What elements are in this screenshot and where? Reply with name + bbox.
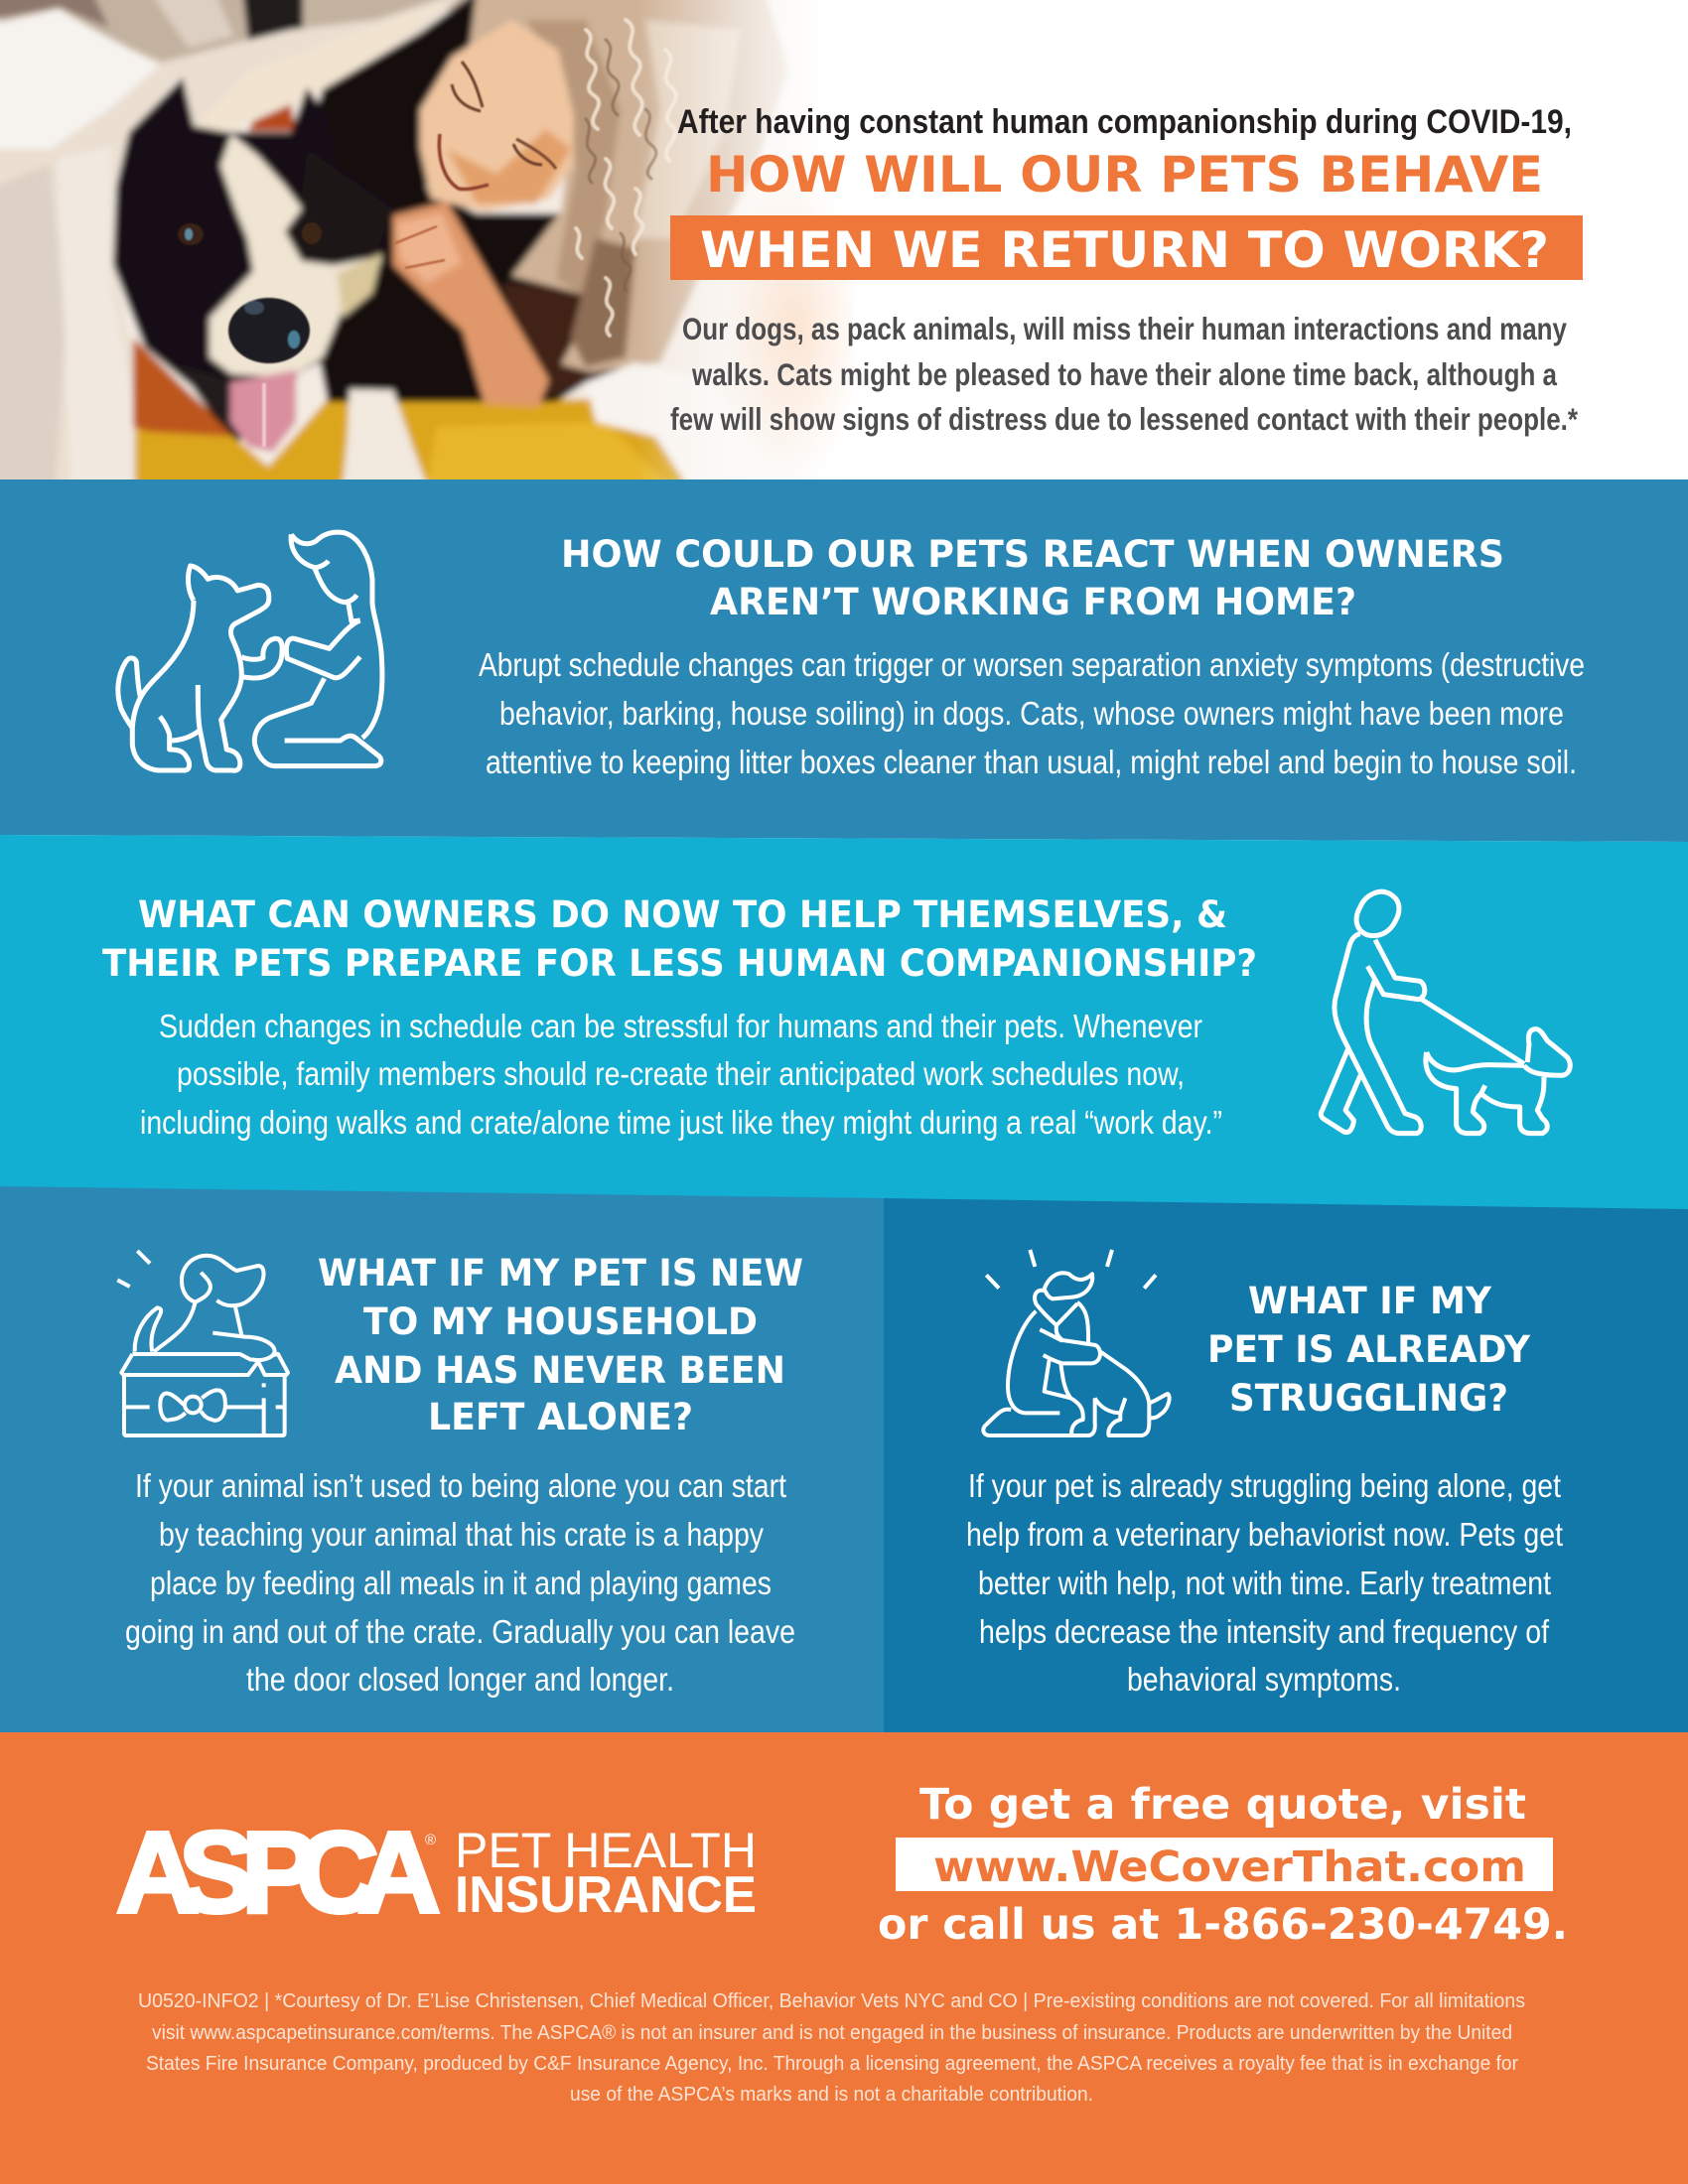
heading: PET IS ALREADY <box>1207 1328 1531 1371</box>
header text block <box>670 103 1583 437</box>
heading: WHAT IF MY <box>1248 1280 1492 1322</box>
body text: including doing walks and crate/alone time just like they might during a real “work day.” <box>140 1105 1222 1142</box>
heading: HOW COULD OUR PETS REACT WHEN OWNERS <box>561 533 1504 576</box>
fine print: use of the ASPCA’s marks and is not a charitable contribution. <box>570 2083 1093 2106</box>
icon: puppy in gift box <box>117 1251 288 1435</box>
body text: If your animal isn’t used to being alone you can start <box>135 1468 787 1505</box>
hand and arm <box>393 202 549 407</box>
footer panel <box>0 1732 1688 2184</box>
logo: ASPCA Pet Health Insurance <box>116 1808 757 1937</box>
heading <box>561 533 1504 623</box>
headline: HOW WILL OUR PETS BEHAVE <box>706 146 1543 204</box>
heading <box>318 1252 803 1438</box>
heading: TO MY HOUSEHOLD <box>363 1300 758 1343</box>
icon: person walking dog <box>1321 891 1570 1134</box>
heading: WHAT IF MY PET IS NEW <box>318 1252 803 1295</box>
body text: Sudden changes in schedule can be stressful for humans and their pets. Whenever <box>159 1009 1202 1045</box>
white fade <box>635 0 854 486</box>
body text: If your pet is already struggling being alone, get <box>968 1468 1562 1505</box>
body text: possible, family members should re-create their anticipated work schedules now, <box>177 1056 1185 1093</box>
fine print: visit www.aspcapetinsurance.com/terms. The ASPCA® is not an insurer and is not engaged in the business of insurance. Products are underwritten by the United <box>152 2021 1512 2044</box>
shirt <box>311 0 620 407</box>
call to action <box>878 1780 1568 1950</box>
heading <box>102 893 1257 985</box>
call to action: or call us at 1-866-230-4749. <box>878 1900 1568 1950</box>
icon: person hugging dog <box>983 1250 1170 1435</box>
headline banner: WHEN WE RETURN TO WORK? <box>700 221 1549 279</box>
fine print: U0520-INFO2 | *Courtesy of Dr. E’Lise Christensen, Chief Medical Officer, Behavior Vets NYC and CO | Pre-existing conditions are not covered. For all limitations <box>138 1989 1525 2012</box>
heading: AND HAS NEVER BEEN <box>335 1349 785 1392</box>
intro line: After having constant human companionship during COVID-19, <box>677 103 1572 141</box>
photo: woman and dog under a blanket <box>0 0 874 496</box>
website banner: www.WeCoverThat.com <box>933 1843 1526 1892</box>
paw <box>342 389 431 496</box>
fine print: States Fire Insurance Company, produced by C&F Insurance Agency, Inc. Through a licensing agreement, the ASPCA receives a royalty fee that is in exchange for <box>146 2052 1518 2075</box>
body text: behavioral symptoms. <box>1127 1662 1401 1699</box>
call to action: To get a free quote, visit <box>919 1780 1526 1830</box>
heading: WHAT CAN OWNERS DO NOW TO HELP THEMSELVES, & <box>138 893 1227 936</box>
body text <box>479 647 1585 781</box>
heading: AREN’T WORKING FROM HOME? <box>710 581 1356 623</box>
heading <box>1207 1280 1531 1420</box>
body text: place by feeding all meals in it and playing games <box>150 1566 772 1602</box>
right blanket <box>584 358 695 479</box>
dog head <box>109 75 394 387</box>
body text <box>125 1468 795 1699</box>
body text: by teaching your animal that his crate is a happy <box>159 1517 764 1554</box>
logo: ASPCA Pet Health Insurance: PET HEALTH <box>455 1823 757 1878</box>
body text: going in and out of the crate. Gradually you can leave <box>125 1614 795 1651</box>
logo: ASPCA Pet Health Insurance: INSURANCE <box>455 1866 757 1924</box>
sofa <box>131 393 688 479</box>
body text <box>966 1468 1564 1699</box>
hair <box>467 0 789 372</box>
heading: LEFT ALONE? <box>428 1396 693 1438</box>
soft peach glow <box>741 208 851 447</box>
face <box>420 20 574 211</box>
photo details <box>178 20 676 447</box>
logo: ASPCA Pet Health Insurance: ASPCA <box>116 1808 441 1937</box>
panel: what if new to household <box>0 1181 884 1732</box>
panel: what can owners do <box>0 835 1688 1209</box>
body text <box>140 1009 1222 1142</box>
mouth and tongue <box>177 365 298 442</box>
body text: help from a veterinary behaviorist now. Pets get <box>966 1517 1564 1554</box>
heading: STRUGGLING? <box>1229 1377 1508 1420</box>
body text: the door closed longer and longer. <box>246 1662 674 1699</box>
logo: ASPCA Pet Health Insurance: ® <box>425 1832 436 1848</box>
body text: helps decrease the intensity and frequency of <box>979 1614 1550 1651</box>
fine print <box>138 1989 1525 2106</box>
heading: THEIR PETS PREPARE FOR LESS HUMAN COMPANIONSHIP? <box>102 942 1257 985</box>
body text: better with help, not with time. Early treatment <box>978 1566 1552 1602</box>
blanket <box>0 0 467 496</box>
intro paragraph <box>670 311 1579 437</box>
icon: dog and owner <box>118 532 382 770</box>
panel: what if already struggling <box>884 1181 1688 1732</box>
panel: how could pets react <box>0 479 1688 842</box>
